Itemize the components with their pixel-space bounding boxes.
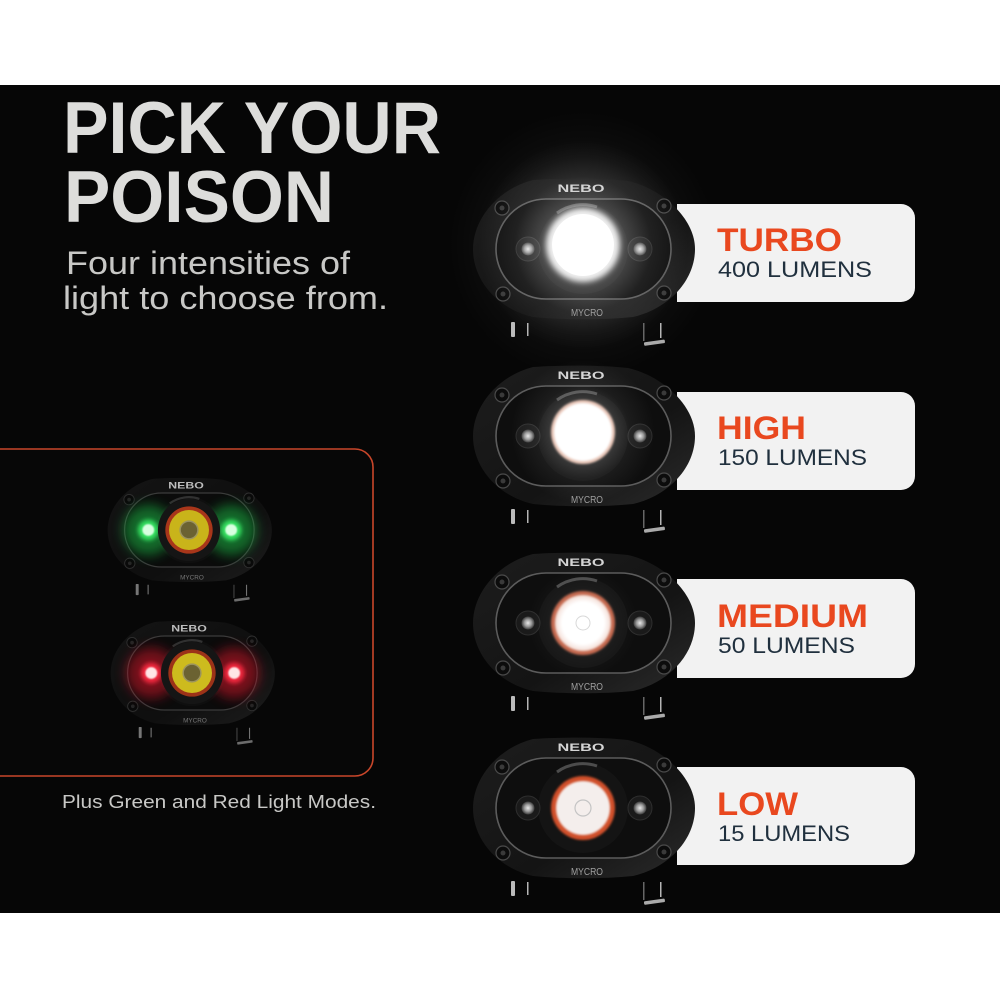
label: turbo: TURBO	[717, 222, 842, 258]
headlamp: green mode	[108, 478, 272, 602]
label: low: 15 LUMENS	[718, 821, 850, 846]
headlamp: green mode: NEBO	[168, 481, 204, 491]
headlamp: medium: NEBO	[558, 557, 605, 569]
label: turbo: 400 LUMENS	[718, 257, 872, 282]
headlamp: red mode	[111, 621, 275, 745]
headlamp: red mode: MYCRO	[183, 718, 207, 725]
subtitle: light to choose from.	[63, 280, 388, 316]
headlamp: turbo: MYCRO	[571, 308, 603, 319]
panel: green and red light modes	[0, 449, 373, 776]
label: high	[677, 392, 915, 490]
headlamp: high: NEBO	[558, 370, 605, 382]
headlamp: turbo	[448, 110, 718, 380]
headlamp: low: NEBO	[558, 742, 605, 754]
headlamp: red mode: NEBO	[171, 624, 207, 634]
title: PICK YOUR	[63, 88, 441, 169]
headlamp: high: MYCRO	[571, 495, 603, 506]
label: high: HIGH	[717, 410, 806, 446]
headlamp: medium	[473, 553, 695, 720]
headlamp: low: MYCRO	[571, 867, 603, 878]
label: medium: 50 LUMENS	[718, 633, 855, 658]
label: medium: MEDIUM	[717, 598, 868, 634]
subtitle	[63, 245, 388, 316]
subtitle: Four intensities of	[66, 245, 350, 281]
label: high: 150 LUMENS	[718, 445, 867, 470]
headlamp: medium: MYCRO	[571, 682, 603, 693]
label: low	[677, 767, 915, 865]
headlamp: low	[473, 738, 695, 905]
headlamp: high	[473, 360, 695, 533]
title: POISON	[64, 157, 334, 238]
title	[63, 88, 441, 238]
headlamp: turbo: NEBO	[558, 183, 605, 195]
label: low: LOW	[717, 786, 799, 822]
label: turbo	[677, 204, 915, 302]
headlamp: green mode: MYCRO	[180, 575, 204, 582]
label: medium	[677, 579, 915, 678]
caption: Plus Green and Red Light Modes.	[62, 792, 376, 812]
